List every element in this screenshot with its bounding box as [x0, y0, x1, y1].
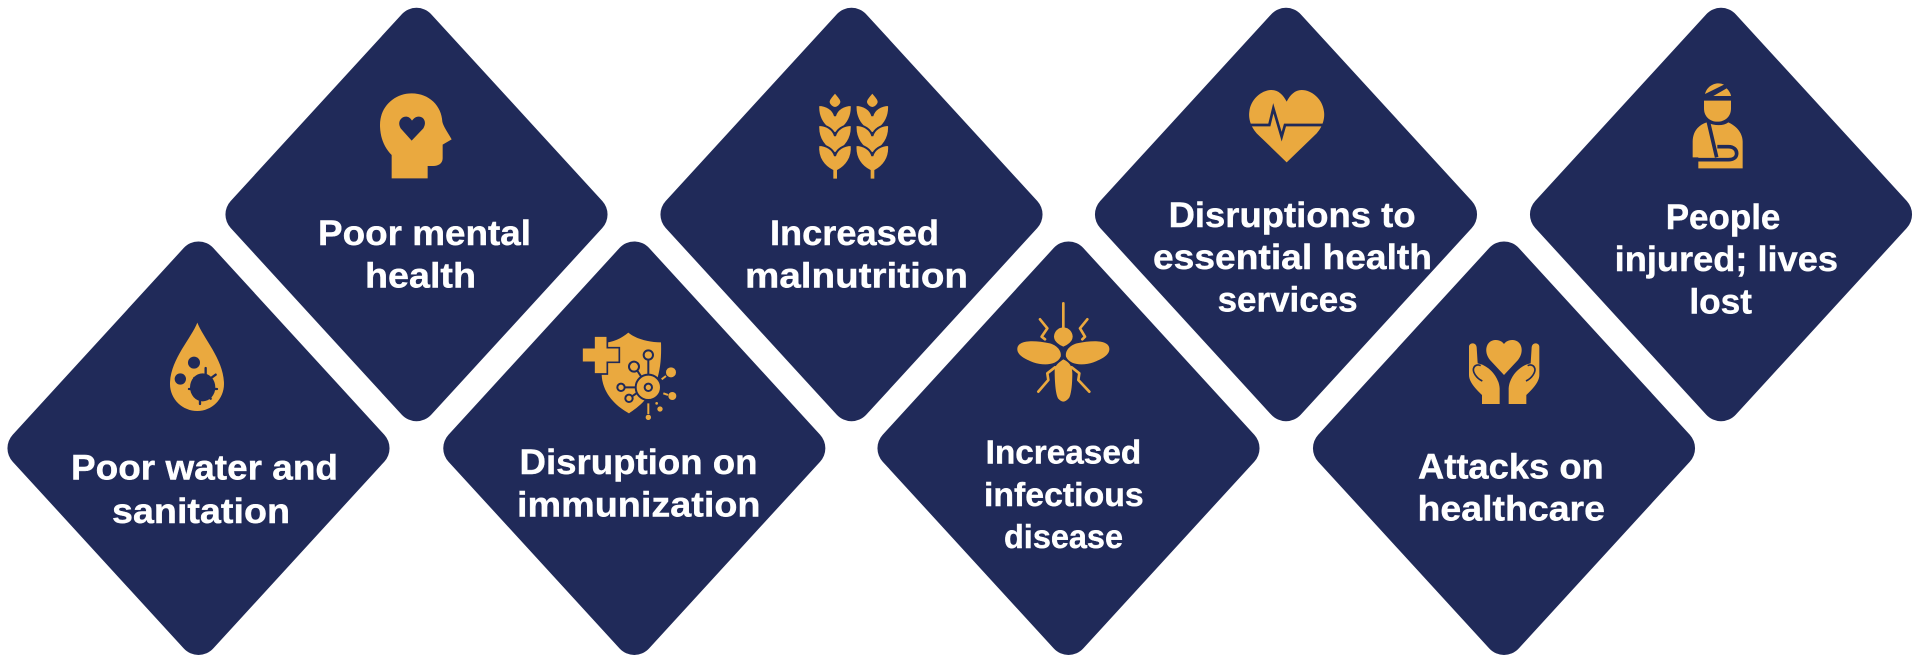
panel: attacks on healthcare [1313, 241, 1695, 655]
label: People [1666, 198, 1780, 237]
diamond background [225, 8, 608, 421]
label [1153, 196, 1432, 320]
label: services [1218, 280, 1358, 320]
label [71, 449, 338, 531]
panel: people injured; lives lost [1530, 8, 1912, 421]
label: Poor water and [71, 449, 338, 488]
label: healthcare [1418, 490, 1605, 529]
diamond background [1313, 241, 1695, 655]
label: disease [1004, 518, 1123, 555]
label: essential health [1153, 238, 1432, 277]
label [1615, 198, 1838, 322]
label: Disruptions to [1169, 196, 1416, 235]
icon: injured person [1690, 83, 1743, 168]
label [318, 214, 531, 296]
label: Increased [770, 214, 939, 253]
label: lost [1689, 283, 1752, 322]
panel: poor water and sanitation [7, 241, 390, 655]
label: immunization [517, 486, 760, 524]
panel: disruptions to essential health services [1095, 8, 1477, 421]
icon: head with heart [380, 93, 452, 178]
label: infectious [984, 476, 1144, 513]
label: Attacks on [1418, 447, 1604, 486]
label: Increased [986, 434, 1141, 471]
label [984, 434, 1144, 555]
icon: shield with plus and virus [582, 333, 676, 420]
label: health [365, 256, 476, 296]
label [517, 443, 760, 524]
panel: disruption on immunization [443, 241, 825, 655]
panel: increased infectious disease [877, 241, 1260, 655]
label: Disruption on [520, 443, 758, 482]
diamond background [7, 241, 390, 655]
panel: poor mental health [225, 8, 608, 421]
label [745, 214, 968, 296]
panel: increased malnutrition [660, 8, 1043, 421]
label [1418, 447, 1605, 529]
label: malnutrition [745, 256, 968, 296]
icon: contaminated water drop [170, 323, 224, 411]
diamond background [1530, 8, 1912, 421]
icon: hands holding heart [1469, 340, 1539, 404]
icon: heart with pulse [1247, 90, 1327, 162]
diamond background [443, 241, 825, 655]
diamond background [877, 241, 1260, 655]
diamond background [1095, 8, 1477, 421]
icon: mosquito [1017, 303, 1109, 402]
label: sanitation [112, 492, 290, 531]
diamond background [660, 8, 1043, 421]
label: Poor mental [318, 214, 531, 253]
icon: wheat stalks [818, 92, 889, 180]
label: injured; lives [1615, 240, 1838, 279]
